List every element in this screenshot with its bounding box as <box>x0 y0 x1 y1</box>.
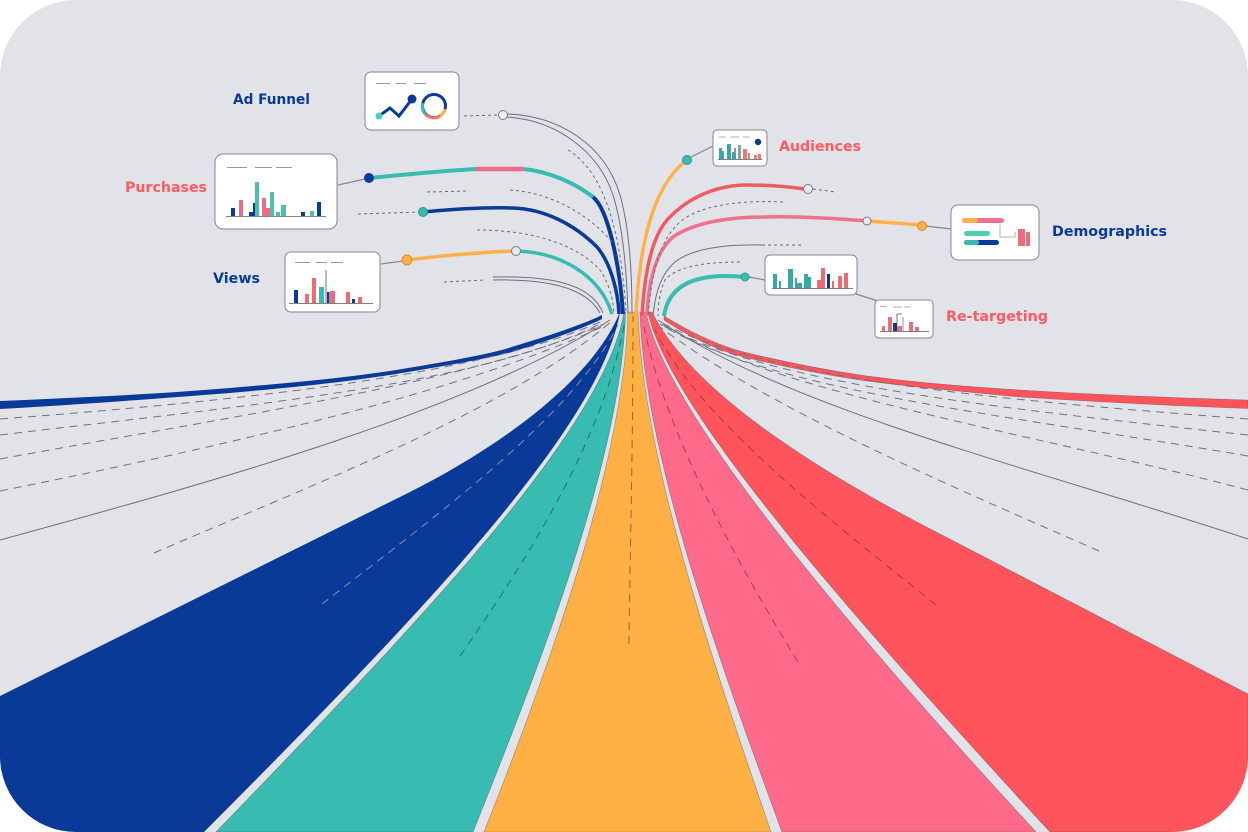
band: pink stream <box>640 312 1036 832</box>
card: re-targeting upper chart <box>765 255 857 295</box>
dashed perspective lines right <box>644 320 1248 662</box>
heading: Ad Funnel: Ad Funnel <box>233 92 310 108</box>
card: ad funnel <box>365 72 459 130</box>
band: teal stream <box>216 312 626 832</box>
band: orange stream <box>484 312 771 832</box>
thin and dashed curves right <box>648 202 878 316</box>
band: red stream <box>648 312 1248 832</box>
curve: audiences orange <box>636 146 713 316</box>
heading: Demographics: Demographics <box>1052 224 1167 240</box>
curve: demographics pink-orange <box>647 217 952 316</box>
card: purchases chart <box>215 154 337 229</box>
band: navy stream <box>0 312 620 832</box>
heading: Views: Views <box>213 271 260 287</box>
band: red upper thin stream <box>664 316 1248 408</box>
curve: navy stream line <box>358 208 619 314</box>
curve: ad funnel double line <box>464 110 632 314</box>
card: audiences chart <box>713 130 767 166</box>
card: re-targeting lower chart <box>875 300 933 338</box>
card: views chart <box>285 252 380 312</box>
heading: Purchases: Purchases <box>125 180 207 196</box>
dashed perspective lines left <box>0 316 633 656</box>
curve: red line <box>642 184 836 316</box>
band: navy upper thin stream <box>0 315 602 409</box>
heading: Re-targeting: Re-targeting <box>946 309 1048 325</box>
dashed and double thin curves left <box>427 150 626 313</box>
curve: views orange-teal <box>381 246 612 314</box>
curve: purchases teal-pink-navy <box>338 169 623 314</box>
card: demographics <box>951 205 1039 260</box>
curve: re-targeting teal <box>664 273 765 316</box>
heading: Audiences: Audiences <box>779 139 861 155</box>
